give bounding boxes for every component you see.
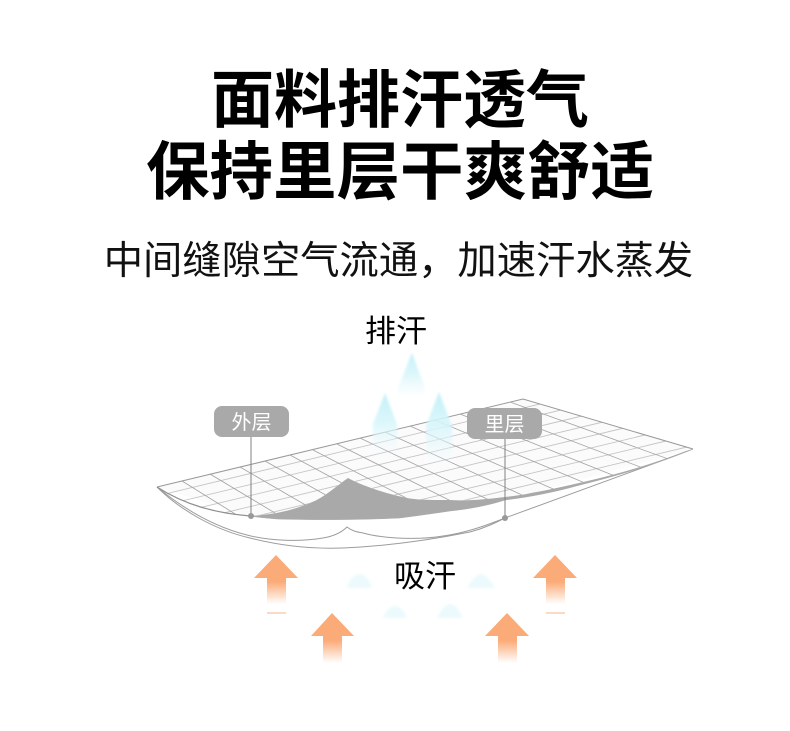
- callout: outer layer: 外层: [232, 411, 272, 434]
- arrow: upper right: [533, 555, 577, 614]
- callout: inner layer: [467, 408, 542, 521]
- moisture mounds: [347, 574, 495, 618]
- inner layer quilted grid: [168, 402, 692, 516]
- droplet top: [398, 353, 425, 398]
- callout: inner layer: 里层: [484, 414, 524, 436]
- title: 保持里层干爽舒适: [146, 138, 654, 208]
- droplet right: [426, 392, 452, 466]
- arrow: upper left: [254, 555, 298, 614]
- inner layer outline: [157, 399, 693, 487]
- sweat droplets rising: [373, 353, 452, 466]
- subtitle: 中间缝隙空气流通，加速汗水蒸发: [104, 239, 693, 283]
- arrow: lower right: [485, 613, 529, 663]
- arrow: lower left: [311, 613, 354, 663]
- title: [146, 66, 654, 208]
- outer layer grey underside: [250, 449, 693, 520]
- callout: outer layer: [214, 406, 289, 519]
- label: sweat absorption: 吸汗: [394, 559, 456, 594]
- label: sweat wicking out: 排汗: [365, 314, 427, 349]
- fabric diagram: [156, 398, 694, 549]
- outer layer lower curves: [157, 449, 693, 548]
- droplet left: [373, 393, 397, 456]
- title: 面料排汗透气: [211, 66, 589, 136]
